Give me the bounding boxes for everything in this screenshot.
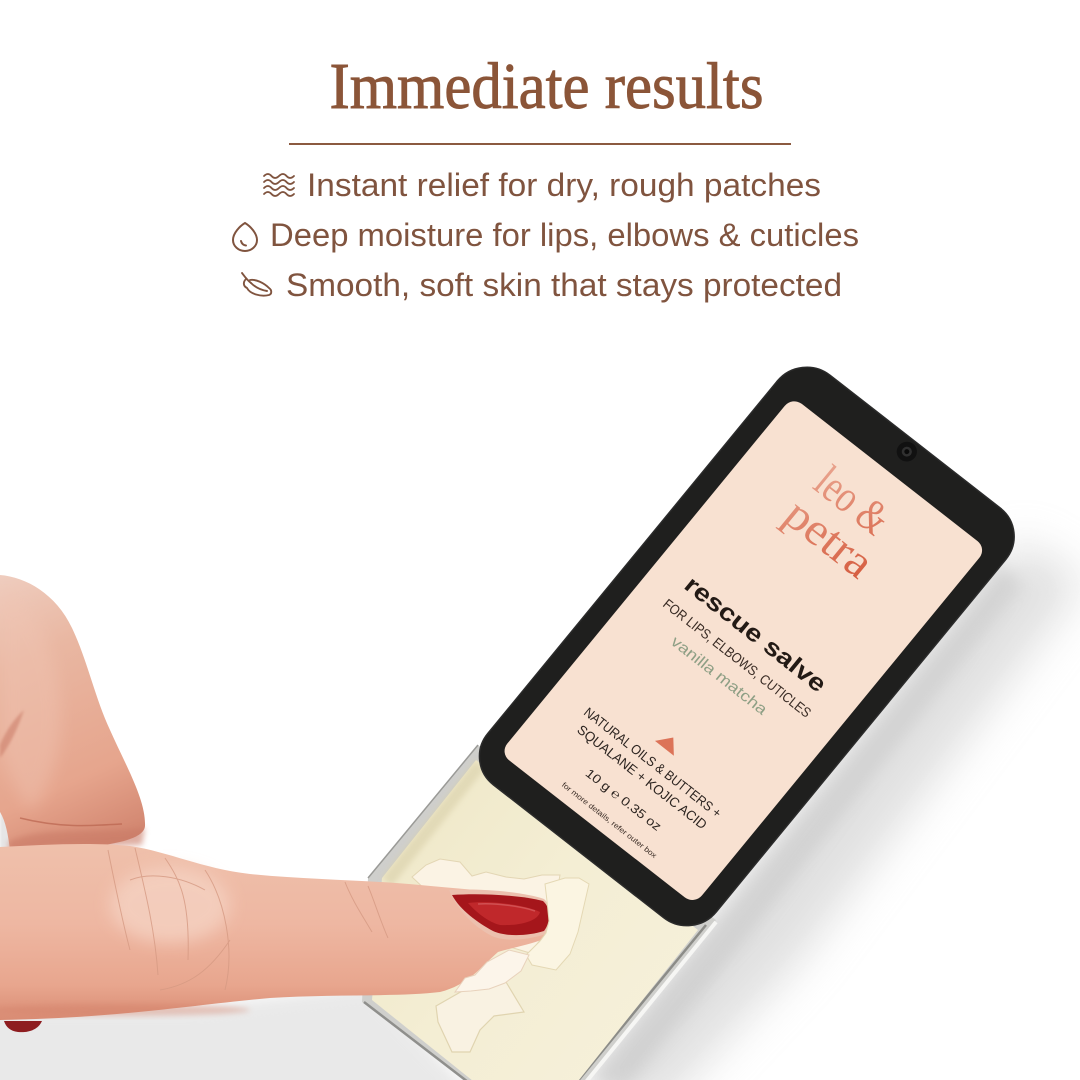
product use: FOR LIPS, ELBOWS, CUTICLES bbox=[660, 596, 814, 720]
lid body bbox=[464, 352, 1029, 940]
icon: feather bbox=[242, 273, 271, 296]
scent: vanilla matcha bbox=[667, 633, 771, 719]
net weight: 10 g ℮ 0.35 oz bbox=[583, 766, 664, 834]
footnote: for more details, refer outer box bbox=[560, 780, 659, 860]
balm scoops bbox=[412, 859, 560, 1052]
knuckle highlight bbox=[110, 867, 230, 943]
benefit 1: instant relief: Instant relief for dry, rough patches bbox=[307, 167, 821, 203]
balm on fingertip bbox=[455, 878, 589, 992]
logo: petra bbox=[775, 488, 884, 588]
lid bbox=[464, 352, 1029, 940]
tin base with balm bbox=[362, 745, 716, 1080]
logo: leo & bbox=[805, 456, 900, 544]
benefit list bbox=[233, 167, 859, 303]
benefit 2: deep moisture: Deep moisture for lips, elbows & cuticles bbox=[270, 217, 859, 253]
nail bbox=[449, 889, 550, 940]
other fingertip nail bbox=[4, 1021, 42, 1032]
product name: rescue salve bbox=[679, 571, 832, 698]
title: Immediate results bbox=[330, 50, 764, 123]
icon: water drop bbox=[233, 223, 257, 251]
divider bbox=[289, 143, 791, 145]
ingredients: NATURAL OILS & BUTTERS + bbox=[581, 705, 724, 821]
lower finger with nail bbox=[0, 844, 550, 1020]
upper finger bbox=[0, 575, 145, 852]
benefit 3: smooth soft skin: Smooth, soft skin that stays protected bbox=[286, 267, 842, 303]
triangle mark bbox=[655, 730, 683, 756]
label card bbox=[500, 397, 987, 905]
finger creases bbox=[108, 848, 388, 990]
tin frame bbox=[362, 745, 716, 1080]
lid hole bbox=[893, 438, 921, 466]
ingredients: SQUALANE + KOJIC ACID bbox=[574, 722, 710, 832]
balm surface bbox=[372, 760, 698, 1080]
icon: waves bbox=[264, 174, 294, 196]
logo bbox=[775, 454, 912, 588]
